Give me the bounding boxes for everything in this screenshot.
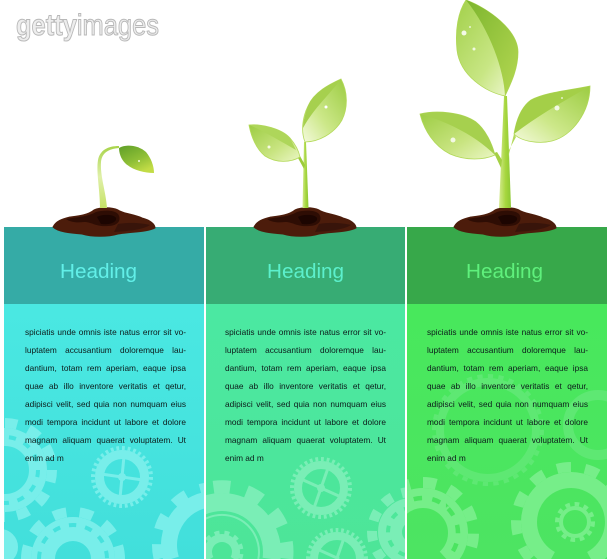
- text block: stage three: adipisci velit, sed quia non numquam eius: [427, 399, 588, 409]
- text block: stage two: quae ab illo inventore veritatis et qetur,: [225, 381, 386, 391]
- gears: stage one: [4, 418, 204, 559]
- plant: stage three: [420, 0, 590, 208]
- soil mound: stage two: [254, 208, 356, 236]
- body: stage two: [206, 304, 405, 559]
- heading band: stage one: [4, 227, 204, 304]
- panel: stage one: [4, 227, 204, 559]
- text block: stage three: luptatem accusantium doloremque lau-: [427, 345, 588, 355]
- seedling: stage two: [249, 79, 346, 208]
- heading band: stage two: Heading: [267, 260, 344, 283]
- gears: stage two: [206, 457, 405, 559]
- text block: stage one: magnam aliquam quaerat voluptatem. Ut: [25, 435, 186, 445]
- text block: stage three: quae ab illo inventore veritatis et qetur,: [427, 381, 588, 391]
- text block: stage one: [25, 326, 186, 463]
- heading band: stage three: [407, 227, 607, 304]
- text block: stage one: enim ad m: [25, 453, 64, 463]
- body: stage three: [407, 304, 607, 559]
- text block: stage one: adipisci velit, sed quia non numquam eius: [25, 399, 186, 409]
- body: stage one: [4, 304, 204, 559]
- text block: stage one: modi tempora incidunt ut labore et dolore: [25, 417, 186, 427]
- heading band: stage three: Heading: [466, 260, 543, 283]
- panel: stage three: [407, 227, 607, 559]
- panel: stage two: [206, 227, 405, 559]
- text block: stage two: modi tempora incidunt ut labore et dolore: [225, 417, 386, 427]
- soil mound: stage three: [454, 208, 556, 236]
- text block: stage two: [225, 326, 386, 463]
- text block: stage three: spiciatis unde omnis iste natus error sit vo-: [427, 326, 588, 336]
- text block: stage one: spiciatis unde omnis iste natus error sit vo-: [25, 326, 186, 336]
- right leaf: [514, 86, 590, 142]
- text block: stage three: magnam aliquam quaerat voluptatem. Ut: [427, 435, 588, 445]
- text block: stage two: enim ad m: [225, 453, 264, 463]
- heading band: stage one: Heading: [60, 260, 137, 283]
- text block: stage two: dantium, totam rem aperiam, eaque ipsa: [225, 363, 386, 373]
- text block: stage two: magnam aliquam quaerat voluptatem. Ut: [225, 435, 386, 445]
- text block: stage three: enim ad m: [427, 453, 466, 463]
- text block: stage one: luptatem accusantium doloremque lau-: [25, 345, 186, 355]
- left leaf: [420, 112, 495, 159]
- soil mound: stage one: [53, 208, 155, 236]
- text block: stage two: adipisci velit, sed quia non numquam eius: [225, 399, 386, 409]
- text block: stage three: dantium, totam rem aperiam, eaque ipsa: [427, 363, 588, 373]
- text block: stage three: [427, 326, 588, 463]
- heading band: stage two: [206, 227, 405, 304]
- text block: stage one: quae ab illo inventore veritatis et qetur,: [25, 381, 186, 391]
- text block: stage two: spiciatis unde omnis iste natus error sit vo-: [225, 326, 386, 336]
- text block: stage three: modi tempora incidunt ut labore et dolore: [427, 417, 588, 427]
- gears: stage three: [407, 374, 607, 559]
- top leaf: [456, 0, 518, 96]
- text block: stage one: dantium, totam rem aperiam, eaque ipsa: [25, 363, 186, 373]
- sprout: stage one: [97, 146, 154, 208]
- text block: stage two: luptatem accusantium doloremque lau-: [225, 345, 386, 355]
- watermark: gettyimages logo: gettyimages: [16, 9, 159, 42]
